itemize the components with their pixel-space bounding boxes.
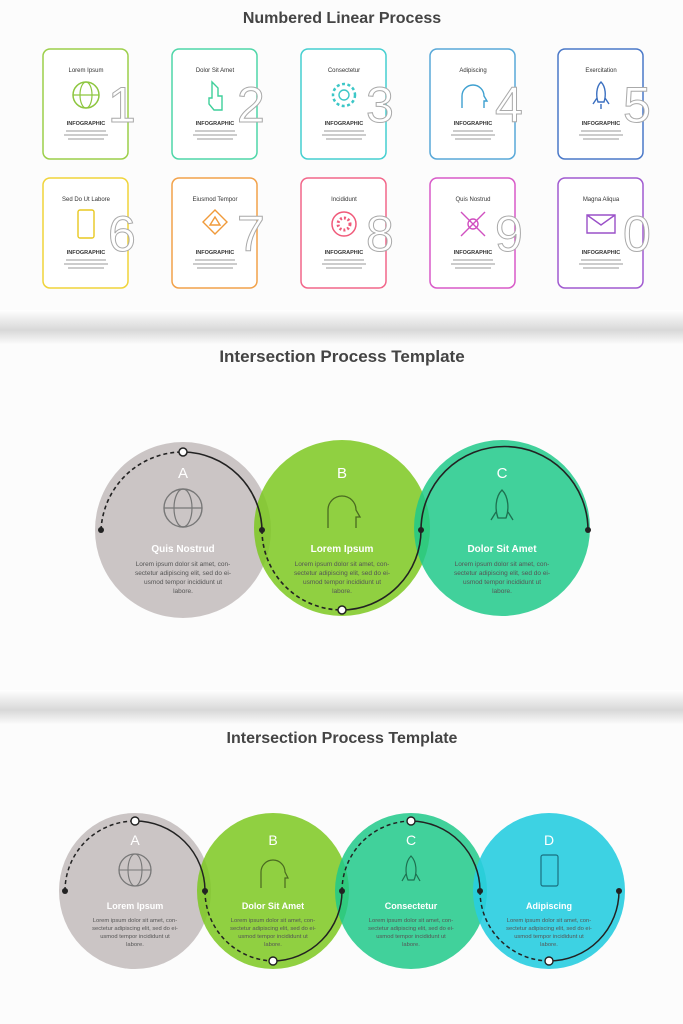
card 5: Exercitation xyxy=(585,68,617,74)
card 2: 2 xyxy=(237,77,265,133)
diagram: 4 circles: labore. xyxy=(126,942,144,948)
card 9 xyxy=(430,178,523,288)
title: numbered linear process: Numbered Linear Process xyxy=(243,10,441,27)
card 7: INFOGRAPHIC xyxy=(196,250,234,256)
diagram: 3 circles: usmod tempor incididunt ut xyxy=(144,579,222,586)
card 1: Lorem Ipsum xyxy=(68,68,104,74)
diagram: 4 circles: Dolor Sit Amet xyxy=(242,901,304,911)
card 9: 9 xyxy=(495,206,523,262)
diagram: 3 circles: A xyxy=(178,465,188,482)
card 2 xyxy=(172,49,265,159)
card 6: 6 xyxy=(108,206,136,262)
diagram: 3 circles: labore. xyxy=(492,588,512,595)
card 7: Eiusmod Tempor xyxy=(193,197,237,203)
diagram: 4 circles: labore. xyxy=(540,942,558,948)
diagram: 3 circles: C xyxy=(497,465,508,482)
diagram: 3 circles xyxy=(95,440,591,618)
diagram: 4 circles: Lorem Ipsum xyxy=(107,901,163,911)
diagram: 3 circles: usmod tempor incididunt ut xyxy=(463,579,541,586)
diagram: 3 circles: B xyxy=(337,465,347,482)
diagram: 3 circles: Lorem Ipsum xyxy=(311,544,373,555)
card 7: 7 xyxy=(237,206,265,262)
diagram: 4 circles: Lorem ipsum dolor sit amet, con- xyxy=(507,918,591,924)
diagram: 4 circles: A xyxy=(130,832,140,848)
card 4 xyxy=(430,49,523,159)
card 7 xyxy=(172,178,265,288)
card 3: INFOGRAPHIC xyxy=(325,121,363,127)
card 3 xyxy=(301,49,394,159)
diagram: 3 circles: sectetur adipiscing elit, sed do ei- xyxy=(135,570,231,577)
card 4: INFOGRAPHIC xyxy=(454,121,492,127)
card 1: 1 xyxy=(108,77,136,133)
card 5 xyxy=(558,49,651,159)
card 5: 5 xyxy=(623,77,651,133)
diagram: 3 circles: labore. xyxy=(332,588,352,595)
diagram: 4 circles: sectetur adipiscing elit, sed do ei- xyxy=(92,926,178,932)
card 3: 3 xyxy=(366,77,394,133)
diagram: 4 circles: D xyxy=(544,832,554,848)
diagram: 4 circles: B xyxy=(268,832,278,848)
diagram: 4 circles: usmod tempor incididunt ut xyxy=(514,934,584,940)
card 3: Consectetur xyxy=(328,68,360,74)
diagram: 4 circles: Lorem ipsum dolor sit amet, con- xyxy=(231,918,315,924)
diagram: 4 circles: Adipiscing xyxy=(526,901,572,911)
diagram: 4 circles: Consectetur xyxy=(385,901,438,911)
diagram: 3 circles: Quis Nostrud xyxy=(151,544,215,555)
card 10: INFOGRAPHIC xyxy=(582,250,620,256)
card 5: INFOGRAPHIC xyxy=(582,121,620,127)
diagram: 4 circles: usmod tempor incididunt ut xyxy=(100,934,170,940)
diagram: 3 circles: usmod tempor incididunt ut xyxy=(303,579,381,586)
card 6 xyxy=(43,178,136,288)
card 1: INFOGRAPHIC xyxy=(67,121,105,127)
diagram: 4 circles: sectetur adipiscing elit, sed do ei- xyxy=(506,926,592,932)
card 4: 4 xyxy=(495,77,523,133)
diagram: 3 circles: Lorem ipsum dolor sit amet, con- xyxy=(295,561,389,568)
diagram: 4 circles: sectetur adipiscing elit, sed do ei- xyxy=(368,926,454,932)
diagram: 4 circles: usmod tempor incididunt ut xyxy=(238,934,308,940)
card 10 xyxy=(558,178,651,288)
diagram: 4 circles: usmod tempor incididunt ut xyxy=(376,934,446,940)
diagram: 4 circles: labore. xyxy=(402,942,420,948)
card 10: 0 xyxy=(623,206,651,262)
card 4: Adipiscing xyxy=(459,68,487,74)
card 6: Sed Do Ut Labore xyxy=(62,197,111,203)
title: intersection process 4: Intersection Process Template xyxy=(227,730,458,747)
diagram: 4 circles: C xyxy=(406,832,416,848)
card 9: INFOGRAPHIC xyxy=(454,250,492,256)
diagram: 4 circles: sectetur adipiscing elit, sed do ei- xyxy=(230,926,316,932)
card 1 xyxy=(43,49,136,159)
card 6: INFOGRAPHIC xyxy=(67,250,105,256)
card 10: Magna Aliqua xyxy=(583,197,620,203)
card 8 xyxy=(301,178,394,288)
diagram: 4 circles: Lorem ipsum dolor sit amet, con- xyxy=(369,918,453,924)
card 8: INFOGRAPHIC xyxy=(325,250,363,256)
diagram: 4 circles: labore. xyxy=(264,942,282,948)
card 2: Dolor Sit Amet xyxy=(196,68,234,74)
diagram: 3 circles: Lorem ipsum dolor sit amet, con- xyxy=(136,561,230,568)
diagram: 3 circles: sectetur adipiscing elit, sed do ei- xyxy=(294,570,390,577)
card 8: 8 xyxy=(366,206,394,262)
card 9: Quis Nostrud xyxy=(455,197,491,203)
card 8: Incididunt xyxy=(331,197,357,203)
diagram: 4 circles: Lorem ipsum dolor sit amet, con- xyxy=(93,918,177,924)
diagram: 3 circles: Dolor Sit Amet xyxy=(467,544,537,555)
diagram: 4 circles xyxy=(59,813,625,969)
diagram: 3 circles: labore. xyxy=(173,588,193,595)
title: intersection process 3: Intersection Process Template xyxy=(219,347,465,366)
card 2: INFOGRAPHIC xyxy=(196,121,234,127)
diagram: 3 circles: sectetur adipiscing elit, sed do ei- xyxy=(454,570,550,577)
diagram: 3 circles: Lorem ipsum dolor sit amet, con- xyxy=(455,561,549,568)
